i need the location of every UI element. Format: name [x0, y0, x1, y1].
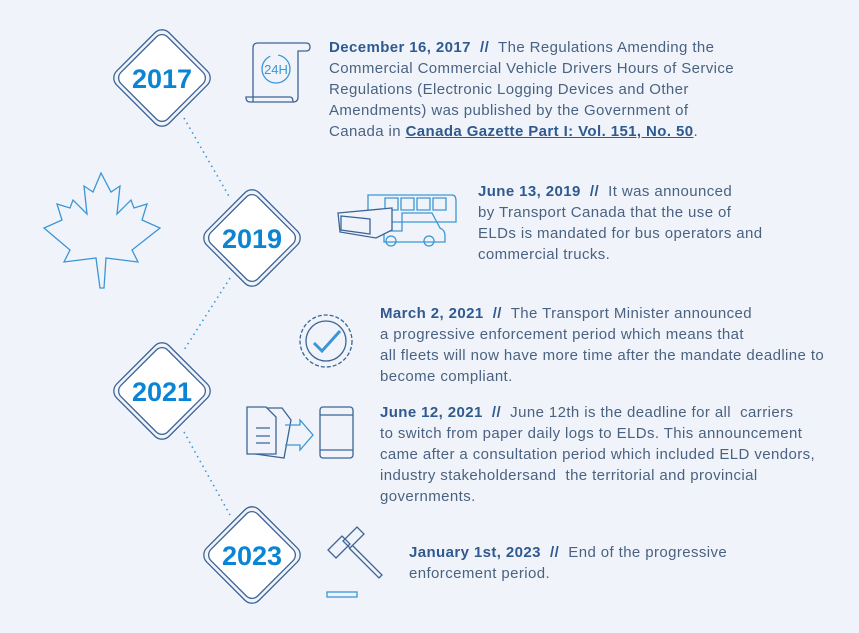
- text: 2019: June 13, 2019 // It was announced: [478, 183, 732, 200]
- diamond: 2021: [110, 339, 214, 443]
- text: 2017: December 16, 2017 // The Regulations Amending the: [329, 39, 714, 56]
- text: 2017: Regulations (Electronic Logging Devices and Other: [329, 81, 689, 98]
- diamond: 2023: [200, 503, 304, 607]
- text: 2023: enforcement period.: [409, 565, 550, 582]
- icon: bus, truck and ELD device: [338, 195, 456, 246]
- connector lines: [184, 118, 230, 515]
- diamond: 2019: [200, 186, 304, 290]
- text: March 2021: a progressive enforcement period which means that: [380, 326, 744, 343]
- text: 2023: January 1st, 2023 // End of the progressive: [409, 544, 727, 561]
- text: 2017: Amendments) was published by the Government of: [329, 102, 688, 119]
- icon: paper to tablet: [247, 407, 353, 458]
- icon: 24H scroll: 24H: [264, 62, 288, 77]
- text: 2019: [478, 183, 763, 263]
- text: 2017: Canada in Canada Gazette Part I: Vol. 151, No. 50.: [329, 123, 698, 140]
- text: June 2021: to switch from paper daily logs to ELDs. This announcement: [380, 425, 802, 442]
- icon: gavel: [327, 527, 382, 597]
- text: 2017: Commercial Commercial Vehicle Drivers Hours of Service: [329, 60, 734, 77]
- icon: badge check: [300, 315, 352, 367]
- diamond: 2017: 2017: [132, 64, 192, 94]
- text: June 2021: governments.: [380, 488, 476, 505]
- diamond: 2017: [110, 26, 214, 130]
- text: June 2021: [380, 404, 815, 505]
- diamond: 2023: 2023: [222, 541, 282, 571]
- text: 2017: [329, 39, 734, 140]
- text: 2019: ELDs is mandated for bus operators and: [478, 225, 763, 242]
- icon: 24H scroll: [246, 43, 310, 102]
- icon: maple leaf: [44, 173, 160, 288]
- text: 2023: [409, 544, 727, 582]
- diamond: 2021: 2021: [132, 377, 192, 407]
- text: March 2021: [380, 305, 824, 385]
- text: June 2021: industry stakeholdersand the territorial and provincial: [380, 467, 758, 484]
- text: March 2021: March 2, 2021 // The Transport Minister announced: [380, 305, 752, 322]
- text: March 2021: become compliant.: [380, 368, 513, 385]
- text: March 2021: all fleets will now have more time after the mandate deadline to: [380, 347, 824, 364]
- text: 2019: by Transport Canada that the use of: [478, 204, 731, 221]
- diamond: 2019: 2019: [222, 224, 282, 254]
- text: June 2021: came after a consultation period which included ELD vendors,: [380, 446, 815, 463]
- text: June 2021: June 12, 2021 // June 12th is the deadline for all carriers: [380, 404, 793, 421]
- text: 2019: commercial trucks.: [478, 246, 610, 263]
